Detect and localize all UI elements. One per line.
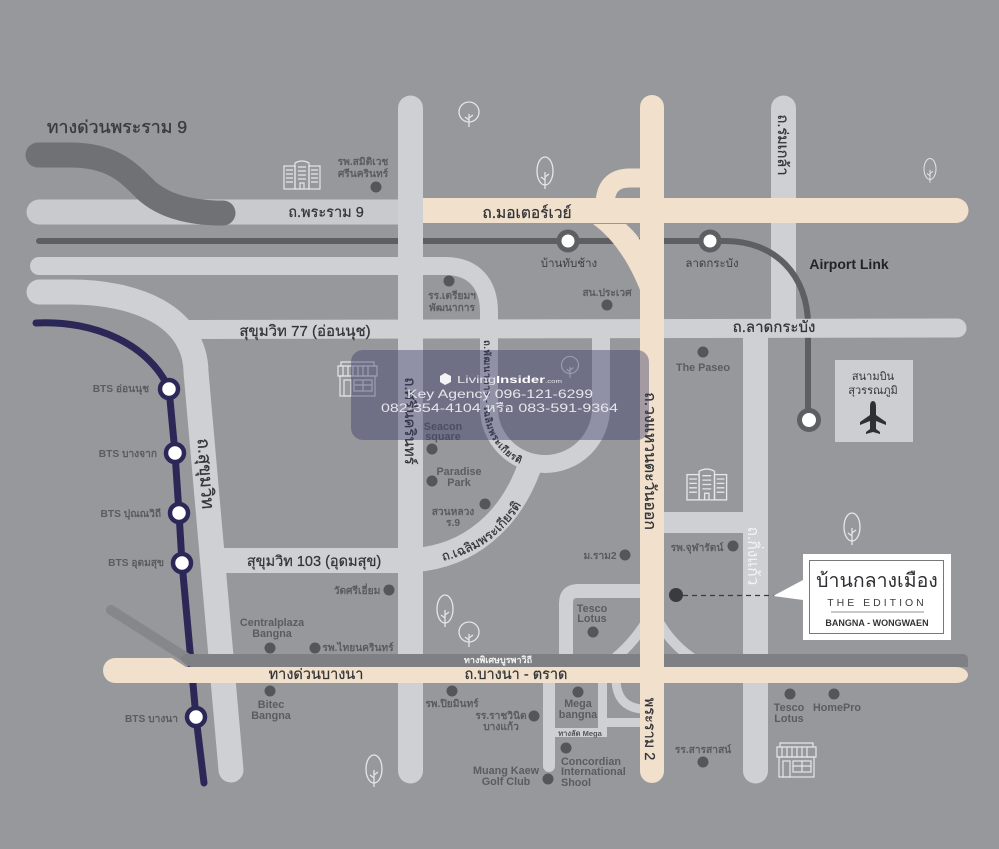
watermark phone 1: Key Agency 096-121-6299 bbox=[407, 387, 593, 401]
poi: Piyamin hospital bbox=[425, 686, 479, 710]
icon: shop west bbox=[338, 362, 377, 396]
poi: Bitec Bangna bbox=[251, 686, 292, 722]
poi: Bitec Bangna: Bangna bbox=[251, 710, 292, 722]
road: Sukhumvit bbox=[39, 292, 231, 770]
poi: Tesco Lotus south: Tesco bbox=[774, 702, 805, 714]
icon: tree 5 bbox=[437, 595, 453, 627]
road: ramp to expressway bbox=[111, 610, 190, 660]
poi: Concordian School: Shool bbox=[561, 777, 591, 789]
poi: Tesco Lotus south: Lotus bbox=[774, 713, 804, 725]
road: Chaloem Phrakiat bbox=[415, 468, 529, 560]
callout location: BANGNA - WONGWAEN bbox=[825, 618, 929, 628]
road: south side roads bbox=[543, 680, 643, 772]
poi: Paradise Park: Paradise bbox=[436, 466, 482, 478]
label: Srinagarindra: ถ.ศรีนครินทร์ bbox=[401, 377, 418, 465]
watermark phone 2: 082-354-4104 หรือ 083-591-9364 bbox=[381, 401, 618, 415]
road: Bang Na - Trat bbox=[103, 658, 968, 683]
poi: Samitivej Srinakarin: ศรีนครินทร์ bbox=[338, 168, 389, 180]
poi: Sarasas school bbox=[675, 744, 731, 768]
poi: Triam Pattanakan school bbox=[428, 276, 476, 314]
poi: Ramkhamhaeng 2 bbox=[583, 550, 630, 562]
poi: Muang Kaew Golf Club: Golf Club bbox=[482, 776, 531, 788]
road: Burapha Withi expressway bbox=[180, 654, 968, 667]
label: Lat Krabang station: ลาดกระบัง bbox=[685, 258, 739, 270]
poi: Chularat hospital bbox=[671, 540, 738, 555]
poi: Tesco Lotus north bbox=[577, 603, 608, 638]
label: BTS Bang Na: BTS บางนา bbox=[125, 714, 178, 725]
road: Rama 9 bbox=[39, 200, 410, 224]
icon: tree 6 bbox=[459, 622, 479, 647]
poi: Thai Nakarin hospital: รพ.ไทยนครินทร์ bbox=[322, 641, 394, 654]
poi: Ramkhamhaeng 2: ม.ราม2 bbox=[583, 551, 617, 562]
label: Sukhumvit vertical: ถ.สุขุมวิท bbox=[193, 437, 218, 510]
poi: Sarasas school: รร.สารสาสน์ bbox=[675, 744, 731, 756]
label: Eastern ring road: ถ.วงแหวนตะวันออก bbox=[641, 392, 658, 530]
BTS line bbox=[36, 323, 204, 783]
BTS labels bbox=[93, 383, 178, 725]
poi: Prawet police: สน.ประเวศ bbox=[582, 287, 632, 299]
poi: Rajavinit Bang Kaeo: บางแก้ว bbox=[483, 721, 519, 733]
poi: Concordian School bbox=[560, 742, 626, 789]
road: ramp arcs bbox=[615, 624, 692, 658]
label: Airport Link: Airport Link bbox=[809, 256, 889, 272]
road: Tesco loop bbox=[566, 591, 645, 660]
icon: tree 1 bbox=[459, 102, 479, 127]
poi: Tesco Lotus north: Lotus bbox=[577, 613, 607, 625]
station: Bang Chak bbox=[166, 444, 184, 462]
airport link line bbox=[39, 241, 808, 420]
label: Sukhumvit 77: สุขุมวิท 77 (อ่อนนุช) bbox=[239, 323, 371, 341]
callout title: บ้านกลางเมือง bbox=[816, 570, 938, 592]
poi: Tesco Lotus south bbox=[774, 688, 805, 725]
station: Punnawithi bbox=[170, 504, 188, 522]
poi: Concordian School: Concordian bbox=[561, 756, 621, 768]
road: Sukhumvit 77 bbox=[190, 328, 957, 330]
poi: Prawet police bbox=[582, 287, 632, 310]
poi: Triam Pattanakan school: รร.เตรียมฯ bbox=[428, 290, 476, 302]
station: On Nut bbox=[160, 380, 178, 398]
road: Rama 2 bbox=[640, 107, 664, 771]
poi: Rajavinit Bang Kaeo: รร.ราชวินิต bbox=[475, 710, 527, 722]
icon: building north bbox=[284, 161, 320, 189]
poi: Bitec Bangna: Bitec bbox=[258, 699, 284, 711]
label: Pattanakan arc: ถ.พัฒนาการ - เฉลิมพระเกียรติ bbox=[484, 340, 522, 464]
points of interest bbox=[240, 156, 861, 789]
watermark panel bbox=[351, 350, 649, 440]
icon: tree 2 bbox=[537, 157, 553, 189]
poi: HomePro bbox=[813, 688, 861, 714]
poi: The Paseo bbox=[676, 346, 730, 374]
label: BTS On Nut: BTS อ่อนนุช bbox=[93, 383, 149, 396]
road: Rom Klao bbox=[771, 108, 796, 325]
poi: HomePro: HomePro bbox=[813, 702, 861, 714]
airport name: สนามบิน bbox=[852, 371, 895, 383]
panel: Suvarnabhumi airport bbox=[835, 360, 913, 442]
poi: Tesco Lotus north: Tesco bbox=[577, 603, 608, 615]
road labels bbox=[47, 115, 889, 764]
heading: Rama 9 expressway: ทางด่วนพระราม 9 bbox=[47, 117, 187, 137]
poi: Central Plaza Bangna: Bangna bbox=[252, 628, 293, 640]
airport name line 2: สุวรรณภูมิ bbox=[848, 385, 898, 397]
label: Sukhumvit 103: สุขุมวิท 103 (อุดมสุข) bbox=[247, 554, 381, 570]
icon: tree 4 bbox=[844, 513, 860, 545]
station: Udom Suk bbox=[173, 554, 191, 572]
station: Lat Krabang bbox=[701, 232, 719, 250]
station: Ban Thap Chang bbox=[559, 232, 577, 250]
poi: Suan Luang R.9: สวนหลวง bbox=[432, 507, 474, 518]
poi: Paradise Park bbox=[426, 466, 482, 489]
icon: watermark logo bbox=[440, 373, 451, 385]
road: motorway ramp bbox=[593, 224, 650, 290]
icon: airplane bbox=[860, 401, 886, 434]
poi: Central Plaza Bangna: Centralplaza bbox=[240, 617, 305, 629]
poi: Wat Si Iam: วัดศรีเอี่ยม bbox=[334, 583, 380, 597]
road: Srinagarindra bbox=[398, 108, 423, 771]
road: Pattanakan loop bbox=[39, 266, 601, 464]
road: connector bbox=[660, 512, 750, 533]
label: Mega shortcut: ทางลัด Mega bbox=[558, 729, 603, 738]
poi: Central Plaza Bangna bbox=[240, 617, 305, 654]
poi: Piyamin hospital: รพ.ปิยมินทร์ bbox=[425, 698, 479, 710]
label: King Kaew: ถ.กิ่งแก้ว bbox=[744, 527, 764, 585]
project location marker bbox=[669, 588, 775, 602]
label: Rom Klao: ถ.ร่มเกล้า bbox=[774, 115, 791, 175]
icon: tree 7 bbox=[366, 755, 382, 787]
label: BTS Punnawithi: BTS ปุณณวิถี bbox=[101, 508, 161, 521]
label: Rama 9 road: ถ.พระราม 9 bbox=[288, 205, 364, 221]
label: Motorway: ถ.มอเตอร์เวย์ bbox=[482, 204, 572, 222]
poi: Seacon Square: square bbox=[425, 431, 461, 443]
poi: The Paseo: The Paseo bbox=[676, 362, 730, 374]
poi: Seacon Square: Seacon bbox=[424, 421, 462, 433]
label: Burapha Withi: ทางพิเศษบูรพาวิถี bbox=[464, 655, 532, 666]
label: Chaloem Phrakiat: ถ.เฉลิมพระเกียรติ bbox=[442, 501, 521, 561]
poi: Mega Bangna: Mega bbox=[564, 698, 593, 710]
icon: tree 3 bbox=[924, 158, 936, 182]
station: Suvarnabhumi bbox=[800, 410, 818, 430]
label: Rama 2: พระราม 2 bbox=[641, 698, 657, 760]
poi: Rajavinit Bang Kaeo bbox=[475, 710, 540, 733]
poi: Suan Luang R.9: ร.9 bbox=[446, 518, 460, 529]
poi: Concordian School: International bbox=[561, 766, 626, 778]
icon: building east bbox=[687, 469, 727, 500]
road: Motorway bbox=[423, 198, 968, 223]
station: Bang Na bbox=[187, 708, 205, 726]
poi: Samitivej Srinakarin: รพ.สมิติเวช bbox=[338, 156, 388, 168]
label: BTS Udom Suk: BTS อุดมสุข bbox=[108, 558, 164, 570]
poi: Paradise Park: Park bbox=[447, 477, 472, 489]
label: BTS Bang Chak: BTS บางจาก bbox=[99, 449, 157, 460]
poi: Muang Kaew Golf Club: Muang Kaew bbox=[473, 765, 540, 777]
airport link stations bbox=[559, 232, 818, 430]
road: Lat Krabang south bbox=[743, 330, 768, 784]
label: Ban Thap Chang: บ้านทับช้าง bbox=[541, 257, 597, 270]
label: Bang Na Trat: ถ.บางนา - ตราด bbox=[465, 667, 567, 683]
callout: project logo bbox=[773, 554, 951, 640]
poi: Chularat hospital: รพ.จุฬารัตน์ bbox=[671, 542, 723, 555]
icon: shop south bbox=[777, 743, 816, 777]
icon: tree 8 bbox=[562, 356, 578, 378]
poi: Samitivej Srinakarin bbox=[338, 156, 389, 192]
poi: Seacon Square bbox=[424, 421, 462, 454]
callout subtitle: THE EDITION bbox=[827, 597, 927, 609]
poi: Mega Bangna bbox=[559, 686, 598, 721]
BTS stations bbox=[160, 380, 205, 726]
label: Lat Krabang road: ถ.ลาดกระบัง bbox=[733, 319, 815, 336]
poi: Suan Luang R.9 bbox=[432, 498, 490, 529]
poi: Muang Kaew Golf Club bbox=[473, 765, 554, 788]
poi: Mega Bangna: bangna bbox=[559, 709, 598, 721]
road: Rama 9 expressway bbox=[38, 155, 223, 213]
poi: Wat Si Iam bbox=[334, 583, 394, 597]
road: motorway loop bbox=[605, 178, 645, 205]
road: Sukhumvit 103 bbox=[222, 548, 412, 573]
watermark brand: Living Insider .com bbox=[457, 374, 563, 386]
poi: Triam Pattanakan school: พัฒนาการ bbox=[429, 302, 476, 314]
label: Bang Na expressway: ทางด่วนบางนา bbox=[269, 667, 363, 683]
